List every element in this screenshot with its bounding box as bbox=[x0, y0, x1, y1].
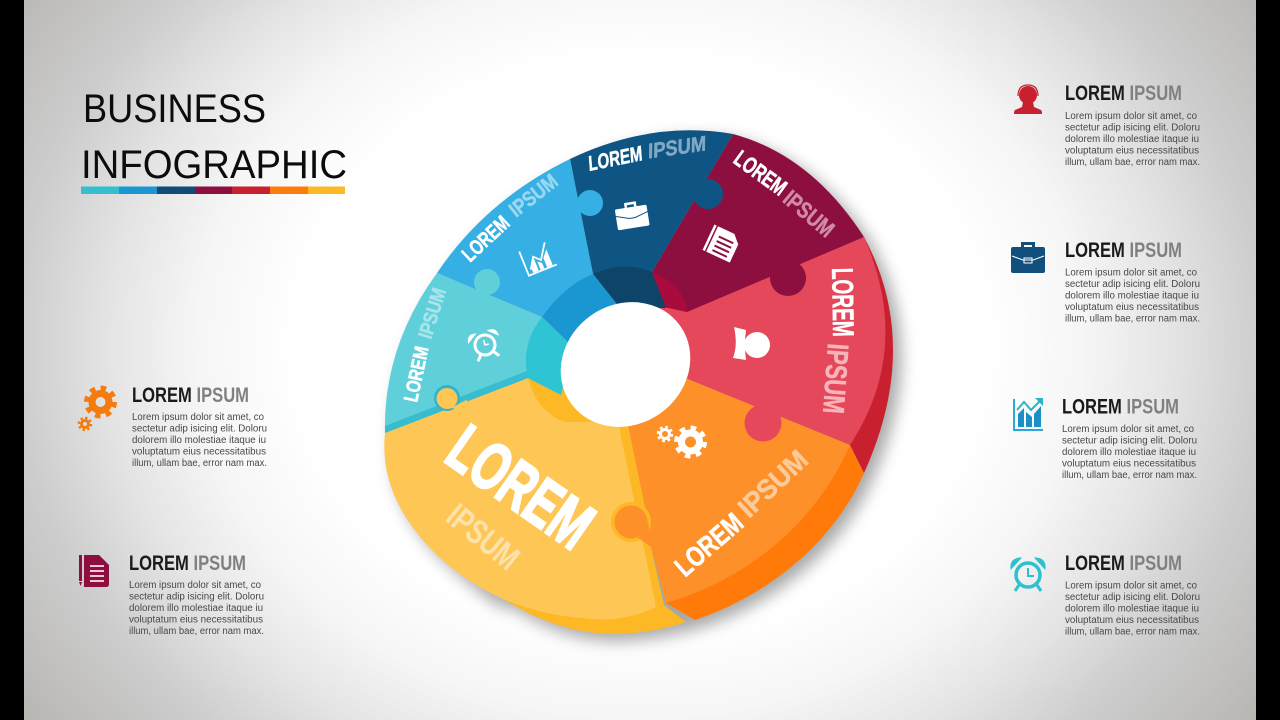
panel: teal alarm bbox=[1011, 552, 1200, 638]
text block: voluptatum eius necessitatibus bbox=[1065, 615, 1199, 626]
icon: headset person bbox=[1014, 85, 1042, 114]
label: IPSUM bbox=[505, 170, 563, 222]
text block: dolorem illo molestiae itaque iu bbox=[1065, 604, 1199, 614]
label: IPSUM bbox=[731, 443, 814, 524]
puzzle ring chart bbox=[384, 130, 901, 641]
text block bbox=[1065, 111, 1200, 168]
icon: chart bbox=[519, 240, 557, 276]
title: BUSINESS bbox=[83, 87, 266, 131]
heading: LOREM IPSUM bbox=[129, 552, 246, 575]
segment: orange bbox=[611, 370, 864, 620]
segment: blue bbox=[437, 159, 620, 347]
icon: gears bbox=[79, 388, 114, 430]
text block bbox=[129, 580, 264, 637]
title colour bar bbox=[81, 186, 345, 194]
label: IPSUM bbox=[648, 132, 706, 164]
panel: maroon document bbox=[79, 552, 264, 637]
text block: sectetur adip isicing elit. Doloru bbox=[1065, 592, 1200, 603]
text block: illum, ullam bae, error nam max. bbox=[1065, 157, 1200, 168]
label: LOREM bbox=[729, 146, 791, 201]
title bbox=[81, 87, 347, 187]
text block: illum, ullam bae, error nam max. bbox=[1062, 470, 1197, 481]
icon: alarm clock bbox=[467, 328, 503, 362]
text block: sectetur adip isicing elit. Doloru bbox=[132, 424, 267, 434]
icon: headset person bbox=[733, 327, 770, 360]
text block: voluptatum eius necessitatibus bbox=[1062, 458, 1196, 470]
puzzle knob bbox=[611, 502, 651, 547]
puzzle knob bbox=[693, 179, 723, 209]
label bbox=[400, 285, 450, 404]
icon: document bbox=[79, 555, 109, 587]
label bbox=[729, 146, 839, 243]
text block: sectetur adip isicing elit. Doloru bbox=[1065, 122, 1200, 134]
heading: LOREM IPSUM bbox=[1065, 239, 1182, 262]
text block: Lorem ipsum dolor sit amet, co bbox=[1062, 424, 1194, 435]
text block: Lorem ipsum dolor sit amet, co bbox=[1065, 111, 1197, 122]
segment: teal bbox=[385, 269, 573, 433]
icon: briefcase bbox=[1011, 242, 1045, 273]
label bbox=[669, 443, 814, 583]
segment: maroon bbox=[652, 134, 864, 312]
segment: yellow bbox=[384, 378, 686, 634]
text block bbox=[1062, 424, 1197, 481]
text block bbox=[1065, 580, 1200, 638]
text block: Lorem ipsum dolor sit amet, co bbox=[1065, 580, 1197, 592]
text block: illum, ullam bae, error nam max. bbox=[1065, 626, 1200, 638]
text block bbox=[1065, 268, 1200, 324]
text block bbox=[132, 412, 267, 469]
puzzle knob bbox=[474, 269, 500, 295]
puzzle knob: yellow bbox=[434, 385, 472, 411]
title: INFOGRAPHIC bbox=[81, 143, 347, 187]
text block: sectetur adip isicing elit. Doloru bbox=[1062, 436, 1197, 446]
text block: sectetur adip isicing elit. Doloru bbox=[1065, 279, 1200, 290]
label: IPSUM bbox=[413, 285, 450, 341]
icon: alarm clock bbox=[1011, 558, 1045, 591]
text block: Lorem ipsum dolor sit amet, co bbox=[1065, 268, 1197, 278]
text block: dolorem illo molestiae itaque iu bbox=[129, 603, 263, 614]
ring shadow bbox=[392, 137, 901, 641]
text block: voluptatum eius necessitatibus bbox=[132, 446, 266, 458]
text block: dolorem illo molestiae itaque iu bbox=[1065, 134, 1199, 145]
text block: voluptatum eius necessitatibus bbox=[1065, 302, 1199, 313]
text block: illum, ullam bae, error nam max. bbox=[129, 626, 264, 637]
panel: blue chart bbox=[1014, 396, 1197, 481]
puzzle knob bbox=[770, 260, 806, 296]
text block: Lorem ipsum dolor sit amet, co bbox=[132, 412, 264, 423]
text block: illum, ullam bae, error nam max. bbox=[132, 458, 267, 469]
label bbox=[816, 268, 859, 415]
heading: LOREM IPSUM bbox=[1065, 82, 1182, 105]
label: big LOREM: LOREM bbox=[433, 412, 607, 564]
icon: document bbox=[703, 225, 742, 263]
text block: voluptatum eius necessitatibus bbox=[129, 614, 263, 626]
panel: red person bbox=[1014, 82, 1200, 168]
heading: LOREM IPSUM bbox=[1062, 396, 1179, 418]
label bbox=[457, 170, 563, 266]
label: LOREM bbox=[588, 141, 643, 176]
text block: voluptatum eius necessitatibus bbox=[1065, 146, 1199, 156]
label: LOREM bbox=[400, 344, 433, 404]
panel: orange gears bbox=[79, 384, 267, 469]
segment: navy bbox=[570, 130, 733, 308]
label: LOREM bbox=[825, 268, 859, 337]
panel: navy briefcase bbox=[1011, 239, 1200, 324]
heading: LOREM IPSUM bbox=[132, 384, 249, 407]
text block: sectetur adip isicing elit. Doloru bbox=[129, 592, 264, 602]
icon: gears bbox=[658, 427, 704, 456]
text block: illum, ullam bae, error nam max. bbox=[1065, 314, 1200, 324]
text block: dolorem illo molestiae itaque iu bbox=[132, 435, 266, 446]
icon: briefcase bbox=[614, 200, 650, 230]
puzzle knob bbox=[744, 404, 782, 442]
label: IPSUM bbox=[778, 186, 839, 243]
label: big IPSUM: IPSUM bbox=[439, 497, 526, 578]
label: IPSUM bbox=[816, 343, 855, 415]
heading: LOREM IPSUM bbox=[1065, 552, 1182, 575]
icon: chart bbox=[1014, 398, 1043, 430]
puzzle knob bbox=[577, 190, 603, 216]
label: LOREM bbox=[669, 507, 750, 583]
text block: dolorem illo molestiae itaque iu bbox=[1062, 447, 1196, 458]
label: LOREM bbox=[457, 211, 514, 266]
label bbox=[588, 132, 706, 176]
centre hole bbox=[536, 277, 715, 452]
text block: Lorem ipsum dolor sit amet, co bbox=[129, 580, 261, 591]
segment: red bbox=[650, 237, 893, 473]
text block: dolorem illo molestiae itaque iu bbox=[1065, 290, 1199, 302]
